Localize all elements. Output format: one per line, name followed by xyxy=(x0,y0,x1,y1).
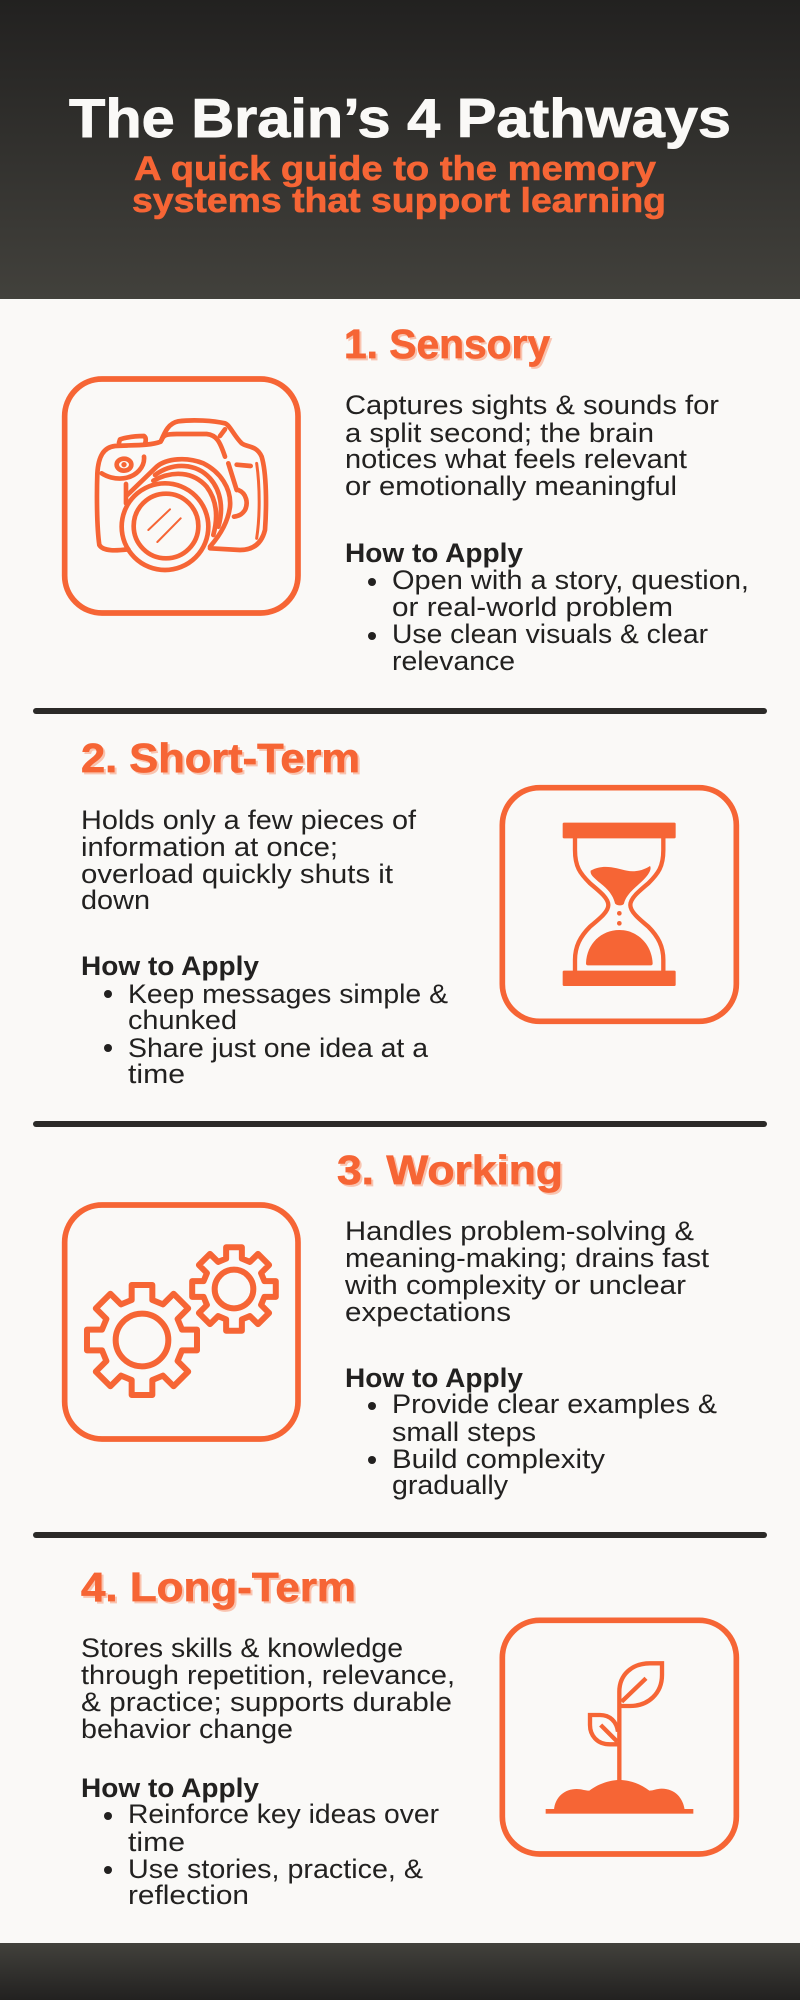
icon: camera xyxy=(65,379,298,613)
subtitle: A quick guide to the memory xyxy=(134,150,656,188)
working description: with complexity or unclear xyxy=(344,1270,686,1300)
panel: long-term xyxy=(81,1564,736,1910)
panel: sensory xyxy=(65,321,749,676)
footer band xyxy=(0,1943,800,2000)
working how to apply: Provide clear examples & xyxy=(392,1389,717,1419)
working how to apply: gradually xyxy=(392,1470,509,1500)
subtitle: systems that support learning xyxy=(132,182,666,220)
sensory description: or emotionally meaningful xyxy=(345,471,677,501)
long-term description: behavior change xyxy=(81,1714,293,1744)
working description: Handles problem-solving & xyxy=(345,1216,694,1246)
divider xyxy=(33,708,767,714)
sensory description: a split second; the brain xyxy=(345,418,654,448)
long-term description xyxy=(81,1633,455,1744)
sensory description: Captures sights & sounds for xyxy=(345,390,719,420)
heading: short-term: 2. Short-Term xyxy=(81,735,360,781)
heading: working: 3. Working xyxy=(337,1147,563,1193)
short-term how to apply: Keep messages simple & xyxy=(128,979,448,1009)
short-term how to apply xyxy=(81,951,448,1089)
heading: sensory: 1. Sensory xyxy=(344,321,550,367)
panel: working xyxy=(65,1147,717,1500)
long-term how to apply: Use stories, practice, & xyxy=(128,1854,423,1884)
working how to apply: small steps xyxy=(392,1417,536,1447)
short-term how to apply: time xyxy=(128,1059,185,1089)
short-term description: information at once; xyxy=(81,832,338,862)
sensory how to apply: Use clean visuals & clear xyxy=(392,619,708,649)
sensory how to apply: or real-world problem xyxy=(392,592,673,622)
long-term description: Stores skills & knowledge xyxy=(81,1633,403,1663)
short-term description xyxy=(81,805,417,915)
sensory how to apply xyxy=(345,538,749,676)
short-term how to apply: How to Apply xyxy=(81,951,259,981)
divider xyxy=(33,1532,767,1538)
long-term how to apply: How to Apply xyxy=(81,1773,259,1803)
long-term how to apply: Reinforce key ideas over xyxy=(128,1799,439,1829)
sensory description xyxy=(345,390,719,501)
sensory description: notices what feels relevant xyxy=(345,444,688,474)
long-term description: & practice; supports durable xyxy=(81,1687,452,1717)
short-term description: overload quickly shuts it xyxy=(81,859,394,889)
header banner xyxy=(0,0,800,299)
short-term description: down xyxy=(81,885,150,915)
divider xyxy=(33,1121,767,1127)
title: The Brain’s 4 Pathways xyxy=(69,87,731,149)
working how to apply: How to Apply xyxy=(345,1363,523,1393)
long-term how to apply: time xyxy=(128,1827,185,1857)
sensory how to apply: How to Apply xyxy=(345,538,523,568)
long-term how to apply xyxy=(81,1773,439,1910)
short-term how to apply: Share just one idea at a xyxy=(128,1033,429,1063)
sensory how to apply: relevance xyxy=(392,646,515,676)
working how to apply: Build complexity xyxy=(392,1444,606,1474)
panel: short-term xyxy=(81,735,736,1089)
working how to apply xyxy=(345,1363,717,1500)
icon: gears xyxy=(65,1205,298,1439)
long-term description: through repetition, relevance, xyxy=(81,1660,455,1690)
working description: expectations xyxy=(345,1297,511,1327)
icon: hourglass xyxy=(502,788,736,1021)
icon: seedling xyxy=(502,1620,736,1854)
subtitle xyxy=(132,150,666,220)
heading: long-term: 4. Long-Term xyxy=(81,1564,356,1610)
working description: meaning-making; drains fast xyxy=(345,1243,710,1273)
short-term how to apply: chunked xyxy=(128,1005,237,1035)
long-term how to apply: reflection xyxy=(128,1880,249,1910)
working description xyxy=(344,1216,710,1327)
sensory how to apply: Open with a story, question, xyxy=(392,565,749,595)
short-term description: Holds only a few pieces of xyxy=(81,805,417,835)
